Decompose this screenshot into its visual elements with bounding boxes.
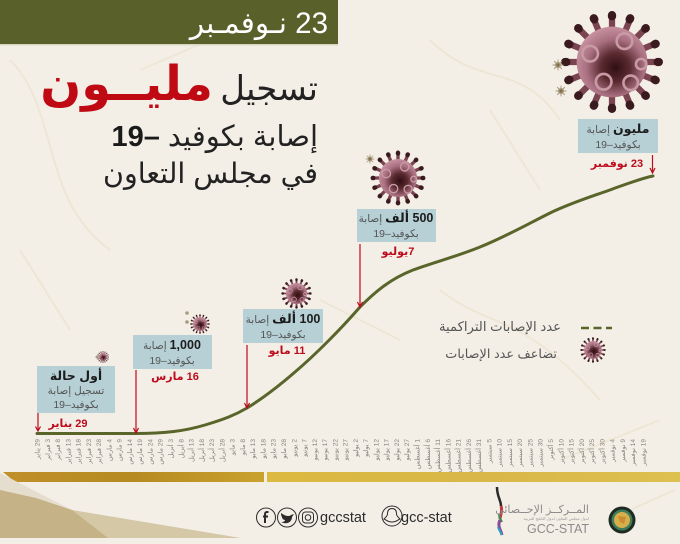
bottom left decorative triangles	[0, 473, 241, 538]
chart x axis date labels: 2 يونيو	[291, 439, 298, 458]
legend: cumulative cases: عدد الإصابات التراكمية	[439, 319, 561, 335]
chart x axis date labels: 13 فبراير	[65, 439, 72, 465]
chart x axis date labels: 11 أغسطس	[433, 439, 442, 472]
title: تسجيل	[220, 70, 318, 108]
chart x axis date labels: 17 يوليو	[384, 439, 391, 462]
callout: 1000 cases: 16 مارس	[151, 371, 199, 383]
chart x axis date labels: 9 مارس	[117, 439, 124, 461]
chart x axis date labels: 30 أكتوبر	[597, 439, 606, 465]
logo: GCC seal	[608, 506, 636, 534]
arrow: 100 thousand cases	[244, 345, 250, 408]
social handle: gcc-stat: gcc-stat	[401, 510, 452, 526]
chart x axis date labels: 8 أبريل	[176, 439, 185, 458]
callout: 500 thousand cases: بكوفيد–19	[373, 228, 419, 240]
chart x axis date labels: 10 سبتمبر	[497, 439, 504, 468]
chart x axis date labels: 4 مارس	[106, 439, 113, 461]
chart x axis date labels: 18 مايو	[260, 439, 267, 460]
callout: 100 thousand cases: بكوفيد–19	[260, 329, 306, 341]
chart x axis date labels: 14 نوفمبر	[630, 439, 637, 467]
callout: first case: بكوفيد–19	[53, 399, 99, 411]
chart x axis date labels: 15 سبتمبر	[507, 439, 514, 468]
chart x axis date labels: 25 سبتمبر	[528, 439, 534, 468]
gold band	[3, 472, 680, 482]
title: إصابة بكوفيد –19	[111, 121, 318, 154]
chart x axis date labels: 9 نوفمبر	[620, 439, 627, 463]
callout: 100 thousand cases: 100 ألف إصابة	[246, 310, 320, 326]
chart x axis date labels: 3 أبريل	[166, 439, 175, 458]
chart x axis date labels: 22 يونيو	[332, 439, 339, 461]
callout: 1000 cases: 1,000 إصابة	[143, 338, 201, 352]
chart x axis date labels: 10 أكتوبر	[556, 439, 565, 465]
callout: first case: تسجيل إصابة	[48, 385, 104, 397]
social media icons	[256, 508, 318, 527]
chart x axis date labels: 22 يوليو	[394, 439, 401, 462]
title	[40, 58, 318, 190]
chart x axis date labels: 5 أكتوبر	[546, 439, 555, 461]
chart x axis date labels: 6 أغسطس	[423, 439, 432, 469]
arrow: 1000 cases	[134, 370, 138, 433]
chart x axis date labels: 13 أبريل	[187, 439, 196, 462]
header banner with date	[0, 0, 338, 46]
chart x axis date labels: 2 يوليو	[353, 439, 360, 458]
chart x axis date labels: 16 أغسطس	[443, 439, 452, 473]
logo: GCC-STAT: المــركــز الإحــصائي	[495, 504, 589, 516]
logo: GCC-STAT	[495, 487, 589, 536]
callout: 500 thousand cases	[357, 209, 436, 258]
chart x axis date labels: 18 فبراير	[76, 439, 83, 465]
callout: 100 thousand cases: 11 مايو	[268, 345, 305, 357]
chart x axis date labels: 30 سبتمبر	[538, 439, 545, 468]
chart x axis date labels: 24 مارس	[148, 439, 154, 465]
chart x axis date labels: 14 مارس	[127, 439, 134, 465]
chart x axis date labels	[34, 439, 647, 473]
legend: doubling of cases: تضاعف عدد الإصابات	[445, 346, 557, 361]
icon: virus 500 thousand	[366, 153, 423, 203]
callout: 100 thousand cases	[243, 309, 323, 357]
arrow: one million cases	[650, 155, 655, 173]
chart x axis date labels: 26 أغسطس	[464, 439, 473, 473]
arrow: first case	[36, 413, 40, 431]
chart x axis date labels: 5 سبتمبر	[486, 439, 493, 464]
logo: GCC-STAT: لدول مجلس التعاون لدول الخليج العربية	[523, 516, 589, 521]
chart x axis date labels: 23 فبراير	[86, 439, 93, 465]
callout: one million cases: بكوفيد–19	[595, 139, 641, 151]
chart x axis date labels: 8 فبراير	[55, 439, 62, 461]
callout: 500 thousand cases: 500 ألف إصابة	[359, 209, 433, 225]
title: في مجلس التعاون	[103, 158, 318, 190]
callout: first case: 29 يناير	[47, 418, 88, 430]
chart x axis date labels: 28 مايو	[281, 439, 288, 460]
chart x axis date labels: 15 أكتوبر	[567, 439, 576, 465]
chart x axis date labels: 31 أغسطس	[474, 439, 483, 473]
chart x axis date labels: 4 نوفمبر	[610, 439, 617, 463]
chart x axis date labels: 28 أبريل	[217, 439, 226, 462]
chart x axis date labels: 21 أغسطس	[454, 439, 463, 473]
callout: one million cases: 23 نوفمبر	[590, 158, 643, 170]
icon: virus 100 thousand	[283, 280, 310, 307]
callout: 1000 cases: بكوفيد–19	[149, 355, 195, 367]
chart x axis date labels: 29 يناير	[34, 439, 42, 460]
social handle: gccstat: gccstat	[320, 510, 366, 526]
chart x axis date labels: 27 يونيو	[343, 439, 350, 461]
chart x axis date labels: 23 مايو	[271, 439, 278, 460]
chart x axis date labels: 17 يونيو	[322, 439, 329, 461]
callout: first case: أول حالة	[50, 367, 102, 383]
chart x axis date labels: 3 فبراير	[45, 439, 52, 461]
callout: one million cases	[578, 119, 658, 170]
header banner with date: 23 نـوفمـبر	[188, 7, 328, 40]
chart x axis date labels: 12 يونيو	[312, 439, 319, 461]
callout: one million cases: مليون إصابة	[587, 122, 649, 136]
chart x axis date labels: 12 يوليو	[373, 439, 380, 462]
chart x axis date labels: 3 مايو	[230, 439, 237, 456]
chart x axis date labels: 19 مارس	[137, 439, 144, 465]
icon: virus first case	[96, 352, 108, 362]
chart x axis date labels: 20 سبتمبر	[517, 439, 524, 468]
arrow: 500 thousand cases	[358, 244, 362, 307]
chart x axis date labels: 28 فبراير	[96, 439, 103, 465]
callout: first case	[37, 366, 115, 430]
chart x axis date labels: 25 أكتوبر	[587, 439, 596, 465]
title: مليــون	[40, 58, 213, 112]
chart x axis date labels: 8 مايو	[240, 439, 247, 456]
chart x axis date labels: 20 أكتوبر	[577, 439, 586, 465]
logo: GCC-STAT: GCC-STAT	[527, 522, 589, 536]
chart x axis date labels: 7 يوليو	[363, 439, 370, 458]
chart x axis date labels: 13 مايو	[250, 439, 257, 460]
chart x axis date labels: 1 أغسطس	[412, 439, 422, 469]
chart x axis date labels: 27 يوليو	[404, 439, 411, 462]
callout: 1000 cases	[133, 335, 212, 383]
icon: snapchat	[382, 506, 402, 526]
callout: 500 thousand cases: 7يوليو	[381, 246, 414, 258]
icon: large virus	[553, 15, 659, 109]
legend: doubling of cases	[445, 338, 605, 362]
chart x axis date labels: 18 أبريل	[197, 439, 206, 462]
chart x axis date labels: 7 يونيو	[302, 439, 308, 458]
chart x axis date labels: 29 مارس	[158, 439, 165, 465]
chart x axis date labels: 19 نوفمبر	[640, 439, 647, 467]
line chart: cumulative cases	[37, 176, 653, 434]
chart x axis date labels: 23 أبريل	[207, 439, 216, 462]
icon: virus 1000	[185, 311, 209, 333]
